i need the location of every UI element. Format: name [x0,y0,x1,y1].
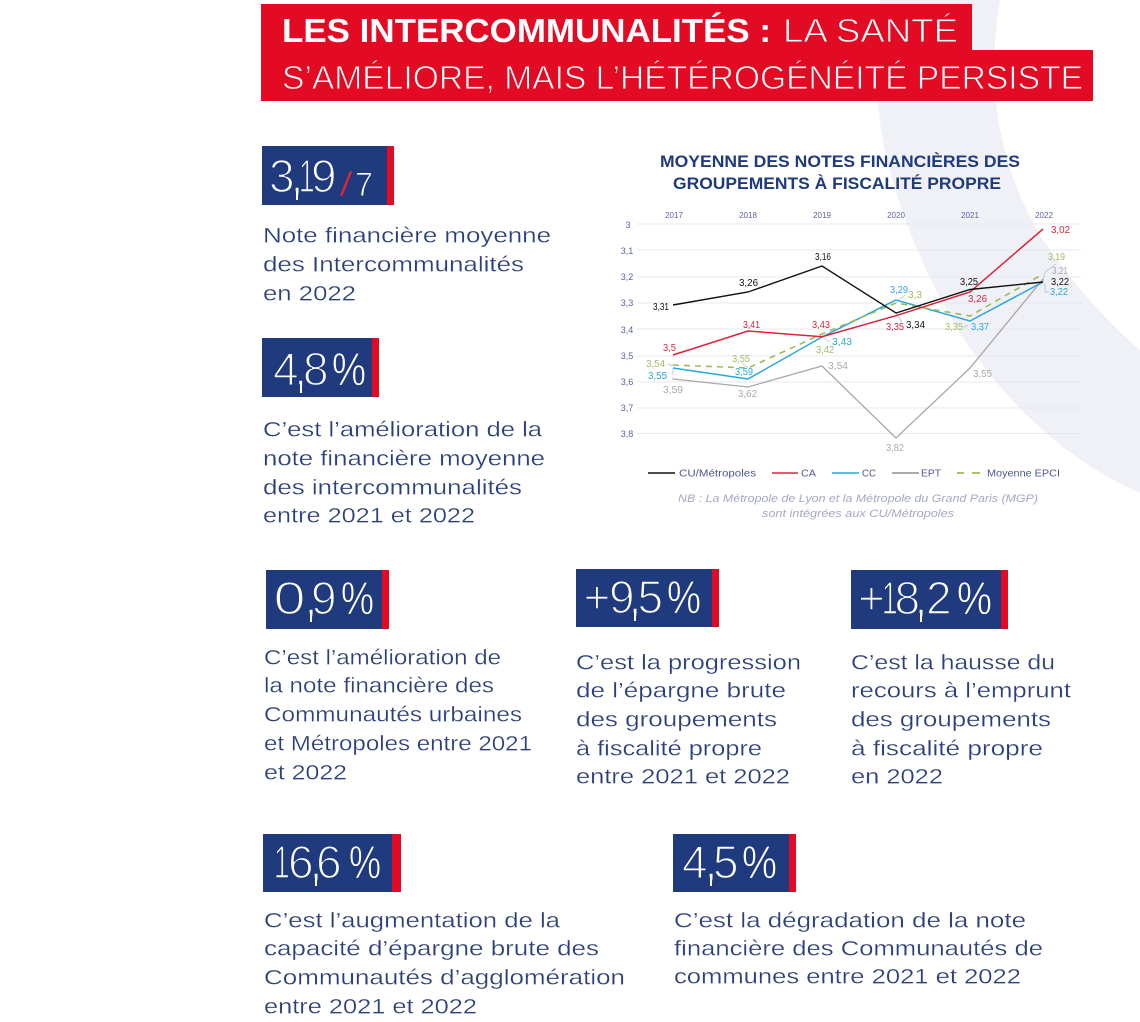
stat: 16,6%: capacité d’épargne brute des [264,937,599,960]
data labels: 3,55 [648,371,667,382]
stat: +18,2%: à fiscalité propre [851,737,1043,760]
data labels: 3,21 [1052,266,1068,277]
stat: 4,8%: C’est l’amélioration de la [263,418,543,441]
value axis: 3 [625,220,631,230]
stat: +9,5%: % [667,571,701,623]
data labels: 3,54 [828,361,848,372]
data labels: 3,3 [908,290,922,301]
stat: 3,19 sur 7: des Intercommunalités [263,253,524,276]
data labels: 3,62 [738,389,757,400]
chart: moyenne des notes financières [621,152,1081,520]
data labels: 3,43 [832,337,852,348]
year axis: 2018 [739,211,757,220]
value axis: 3,3 [621,298,633,308]
data labels: 3,26 [739,278,758,289]
data labels: 3,5 [663,343,676,354]
stat: 16,6% [263,834,625,1018]
line: moyenne EPCI [673,274,1043,368]
data labels: 3,22 [1051,277,1069,288]
data labels: 3,55 [973,369,992,380]
line: CC [673,282,1043,379]
stat: +9,5%: de l’épargne brute [576,679,786,702]
data labels: 3,25 [960,277,978,288]
background swoosh [878,0,1140,493]
stat: +9,5% [576,569,801,788]
data labels: 3,22 [1050,287,1068,298]
legend: EPT [921,468,941,480]
year axis: 2020 [887,211,905,220]
stat: +18,2%: recours à l’emprunt [851,679,1071,702]
stat: 3,19 sur 7: 3, [269,150,303,202]
chart title [660,152,1020,193]
data labels: 3,59 [735,367,753,378]
year axis: 2017 [665,211,683,220]
stat: 4,5%: financière des Communautés de [674,937,1043,960]
note: NB : La Métropole de Lyon et la Métropole du Grand Paris (MGP) [678,493,1038,505]
stat: +9,5%: à fiscalité propre [576,737,762,760]
stat: 0,9% [264,570,532,784]
stat: +18,2%: + [858,572,885,624]
data labels: 3,41 [743,320,760,331]
stat: 16,6%: 1 [274,836,290,888]
stat: 4,5%: communes entre 2021 et 2022 [674,965,1021,988]
leader lines [668,264,1056,380]
year axis: 2022 [1035,211,1053,220]
data labels: 3,82 [886,443,904,454]
stat: +18,2%: C’est la hausse du [851,651,1055,674]
data labels: 3,29 [890,285,908,296]
stat: 0,9%: Communautés urbaines [264,703,522,726]
title banner: LES INTERCOMMUNALITÉS : [282,12,771,50]
stat: 16,6%: % [349,836,381,888]
stat: 4,5%: 4,5 [682,836,739,888]
stat: 0,9%: 0 [274,572,306,624]
value axis: 3,5 [621,351,633,361]
stat: +9,5%: C’est la progression [576,651,801,674]
stat: 0,9%: et 2022 [264,761,347,784]
data labels: 3,54 [646,359,665,370]
legend [648,468,1060,480]
data labels: 3,43 [812,320,830,331]
stat: 4,5%: % [742,836,777,888]
data labels: 3,26 [968,294,987,305]
data labels: 3,37 [971,322,989,333]
stat: +18,2%: 1 [882,572,898,624]
stat: +18,2%: 8,2 [894,572,952,624]
data labels: 3,31 [653,302,669,313]
year axis: 2019 [813,211,831,220]
value axis: 3,7 [621,403,633,413]
data labels: 3,42 [816,345,834,356]
stat: 3,19 sur 7: 9 [311,150,337,202]
data labels: 3,02 [1051,225,1070,236]
stat: 3,19 sur 7: Note financière moyenne [263,224,551,247]
stat: 16,6%: entre 2021 et 2022 [264,995,477,1018]
chart title: MOYENNE DES NOTES FINANCIÈRES DES [660,152,1020,171]
value axis: 3,2 [621,272,633,282]
title banner: LA SANTÉ [783,13,958,50]
stat: 4,8%: 4,8 [273,343,329,395]
value axis [621,220,633,439]
value axis: 3,8 [621,429,633,439]
stat: 3,19 sur 7: / [339,166,354,204]
line: CA [673,229,1043,355]
data labels: 3,16 [815,252,831,263]
stat: 16,6%: C’est l’augmentation de la [264,909,561,932]
stat: 16,6%: 6,6 [288,836,342,888]
stat: 4,8%: % [332,343,366,395]
stat: 4,8%: des intercommunalités [263,476,522,499]
stat: 0,9%: et Métropoles entre 2021 [264,732,532,755]
data labels: 3,55 [732,354,750,365]
legend: CU/Métropoles [679,468,756,480]
year axis: 2021 [961,211,979,220]
stat: 3,19 sur 7: 1 [299,150,315,202]
stat: 0,9%: % [341,572,374,624]
title banner [261,4,1093,101]
stat: 4,8%: note financière moyenne [263,447,545,470]
stat: +9,5%: entre 2021 et 2022 [576,765,790,788]
data labels [646,225,1070,454]
stat: +9,5%: des groupements [576,708,777,731]
stat: +18,2%: des groupements [851,708,1051,731]
stat: +18,2%: % [957,572,992,624]
stat: 3,19 sur 7: 7 [355,166,373,204]
stat: 3,19 sur 7 [262,146,551,305]
stat: 16,6%: Communautés d’agglomération [264,966,625,989]
stat: 0,9%: C’est l’amélioration de [264,646,501,669]
stat: 0,9%: la note financière des [264,674,494,697]
value axis: 3,4 [621,325,633,335]
data labels: 3,19 [1048,252,1065,263]
note [678,493,1038,520]
title banner: S’AMÉLIORE, MAIS L’HÉTÉROGÉNÉITÉ PERSISTE [282,60,1083,97]
data labels: 3,35 [945,322,963,333]
legend: CA [801,468,816,480]
legend: Moyenne EPCI [987,468,1060,480]
stat: +9,5%: +9,5 [584,571,663,623]
value axis: 3,1 [621,246,633,256]
stat: +18,2% [851,570,1071,788]
chart title: GROUPEMENTS À FISCALITÉ PROPRE [673,174,1001,193]
stat: 4,8%: entre 2021 et 2022 [263,504,475,527]
note: sont intégrées aux CU/Métropoles [762,508,955,520]
stat: 4,5%: C’est la dégradation de la note [674,909,1026,932]
line: EPT [673,279,1043,438]
stat: +18,2%: en 2022 [851,765,943,788]
stat: 3,19 sur 7: en 2022 [263,282,356,305]
data labels: 3,59 [663,385,683,396]
stat: 0,9%: ,9 [305,572,337,624]
stat: 4,5% [673,834,1043,988]
year axis [665,211,1053,220]
data labels: 3,34 [906,320,925,331]
legend: CC [862,468,876,480]
data labels: 3,35 [886,322,904,333]
stat: 4,8% [262,338,545,527]
value axis: 3,6 [621,377,633,387]
line: CU/Métropoles [673,266,1043,313]
